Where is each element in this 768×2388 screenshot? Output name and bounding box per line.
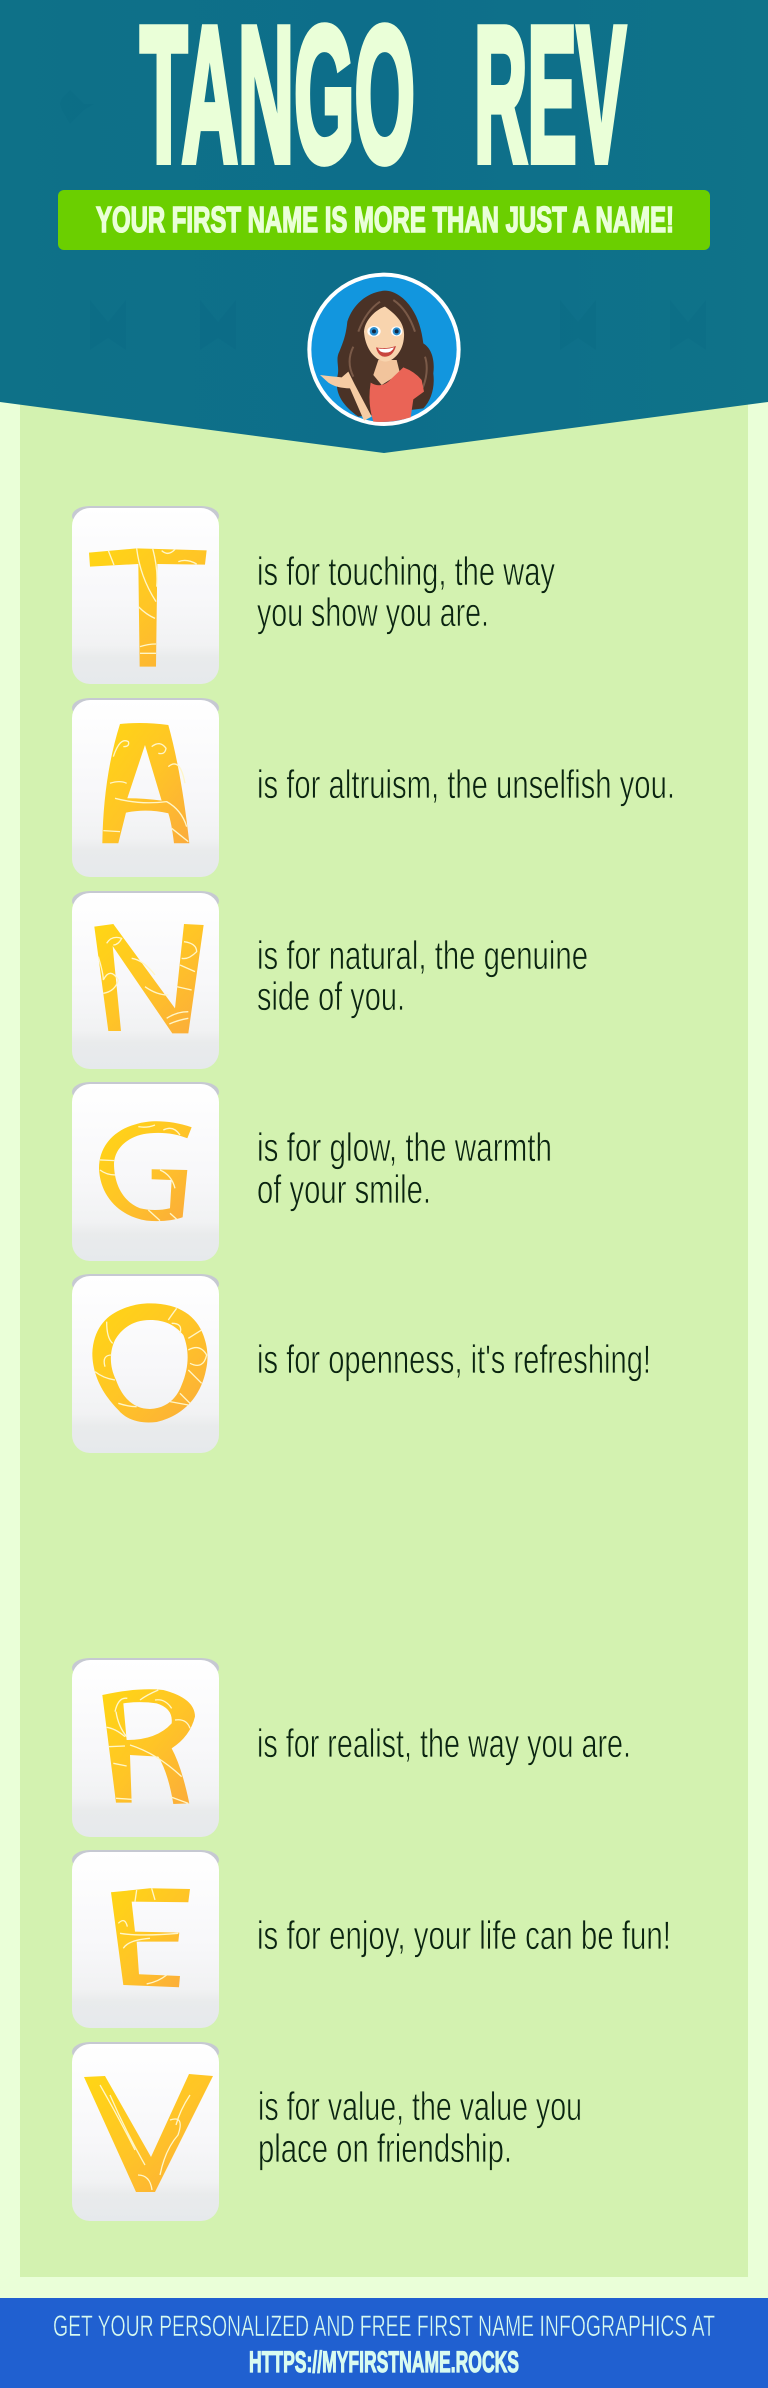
card R <box>72 1658 219 1837</box>
letter row G <box>72 1082 552 1261</box>
face <box>364 307 404 362</box>
letter row T <box>72 506 555 684</box>
shirt <box>369 367 424 422</box>
letter row V <box>72 2042 582 2221</box>
text T <box>257 550 555 635</box>
text G: is for glow, the warmth <box>257 1126 552 1170</box>
letter row O <box>72 1274 651 1453</box>
letter row R <box>72 1658 631 1837</box>
neck <box>373 360 400 385</box>
letter E <box>111 1888 190 1987</box>
text T: you show you are. <box>257 591 489 635</box>
hair <box>337 291 434 417</box>
card T <box>72 506 219 684</box>
card G <box>72 1082 219 1261</box>
text G: of your smile. <box>257 1168 431 1212</box>
text T: is for touching, the way <box>257 550 555 594</box>
card N <box>72 891 219 1069</box>
text V <box>258 2085 582 2171</box>
text N: side of you. <box>257 975 405 1019</box>
letter V <box>84 2074 213 2192</box>
letter row E <box>72 1850 671 2028</box>
text N: is for natural, the genuine <box>257 934 588 978</box>
content panel <box>20 380 748 2277</box>
letter G <box>99 1121 192 1221</box>
footer text: HTTPS://MYFIRSTNAME.ROCKS <box>249 2346 519 2379</box>
letter R <box>102 1689 195 1804</box>
smile <box>376 346 396 357</box>
text N <box>257 934 588 1019</box>
header banner <box>0 0 768 453</box>
footer text <box>53 2310 715 2379</box>
subtitle banner <box>58 190 710 250</box>
avatar: woman in circle <box>307 273 461 426</box>
card E <box>72 1850 219 2028</box>
letter T <box>89 548 207 667</box>
letter A <box>102 723 189 843</box>
footer bar <box>0 2298 768 2388</box>
arm and hand <box>320 372 372 421</box>
card V <box>72 2042 219 2221</box>
card O <box>72 1274 219 1453</box>
text R: is for realist, the way you are. <box>257 1722 631 1766</box>
letter row A <box>72 698 675 877</box>
card A <box>72 698 219 877</box>
text V: place on friendship. <box>258 2127 512 2171</box>
letter row N <box>72 891 588 1069</box>
letter N <box>94 924 204 1033</box>
text V: is for value, the value you <box>258 2085 582 2129</box>
letter O <box>92 1303 207 1422</box>
text G <box>257 1126 552 1212</box>
eyes <box>367 326 402 337</box>
